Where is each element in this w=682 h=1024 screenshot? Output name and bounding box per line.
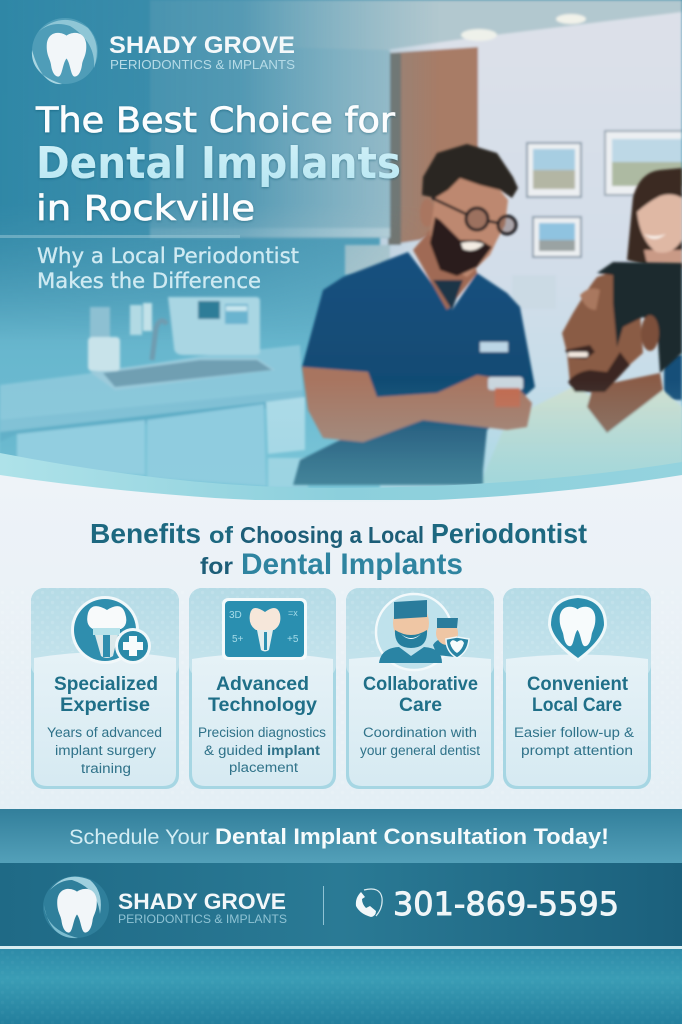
card description: Years of advanced — [47, 725, 162, 740]
footer logo — [43, 876, 109, 938]
hero photo: clinic scene — [0, 0, 682, 490]
icon: phone — [356, 889, 382, 917]
card title: Care — [399, 695, 442, 716]
call to action band: Schedule Your — [69, 826, 209, 849]
woman in background — [627, 168, 682, 400]
card title: Collaborative — [363, 674, 478, 695]
logo emblem — [32, 18, 98, 84]
logo: header — [32, 18, 295, 84]
logo tagline: PERIODONTICS & IMPLANTS — [110, 58, 295, 72]
panel: convenient local care — [503, 588, 651, 789]
icon: digital scan screen: 5+ — [232, 634, 244, 645]
card description — [198, 725, 326, 775]
hero title: Dental Implants — [36, 138, 401, 189]
bottom band — [0, 946, 682, 1024]
benefits heading — [90, 518, 587, 581]
card description — [514, 725, 634, 758]
bottom teal fade — [0, 380, 682, 490]
card description: Easier follow-up & — [514, 725, 634, 740]
footer contact band — [0, 863, 682, 946]
hero title — [35, 101, 401, 229]
benefits section background — [0, 475, 682, 812]
wave divider — [0, 453, 682, 500]
card description: placement — [229, 760, 298, 775]
kitchen counter and sink — [0, 297, 308, 488]
hero title: The Best Choice for — [35, 101, 396, 141]
card description: & guided — [204, 743, 263, 758]
dentist face — [420, 199, 434, 227]
card title: Specialized — [54, 674, 158, 695]
card description: Precision diagnostics — [198, 725, 326, 740]
benefits heading: Choosing a — [240, 522, 362, 548]
card description — [47, 725, 162, 776]
card title: Local Care — [532, 695, 622, 716]
panel: advanced technology — [189, 588, 336, 789]
benefits heading: Dental Implants — [241, 548, 463, 581]
benefits heading: of — [209, 522, 233, 548]
icon: dental care team — [376, 594, 469, 670]
card title: Technology — [208, 695, 317, 716]
card description: implant — [267, 743, 321, 758]
dentist forearm and hands — [302, 367, 532, 442]
card title: Convenient — [527, 674, 629, 695]
benefits heading: for — [200, 553, 233, 579]
icon: dental implant — [71, 596, 151, 664]
card description — [360, 725, 480, 758]
card title: Advanced — [216, 674, 309, 695]
call to action band: Dental Implant Consultation Today! — [215, 824, 609, 849]
panel: specialized expertise — [31, 588, 179, 789]
card title — [208, 674, 317, 716]
patient — [480, 262, 682, 484]
card description: your general dentist — [360, 743, 480, 758]
call to action band — [0, 809, 682, 863]
card description: implant surgery — [55, 743, 156, 758]
hero subtitle — [37, 244, 299, 293]
card title: Expertise — [60, 695, 150, 716]
icon: digital scan screen: +5 — [287, 634, 299, 645]
icon: digital scan screen — [222, 598, 307, 660]
card description: prompt attention — [521, 743, 633, 758]
dentist scrubs — [293, 252, 535, 485]
card title — [54, 674, 158, 716]
hero subtitle: Why a Local Periodontist — [37, 244, 299, 268]
card title — [527, 674, 629, 716]
logo name: SHADY GROVE — [109, 32, 295, 59]
icon: digital scan screen: =x — [288, 608, 298, 618]
icon: digital scan screen: 3D — [229, 610, 242, 621]
hero subtitle: Makes the Difference — [37, 269, 261, 293]
footer tagline: PERIODONTICS & IMPLANTS — [118, 914, 287, 926]
card description: training — [81, 761, 131, 776]
clinic wall and ceiling — [150, 0, 682, 490]
card title — [363, 674, 478, 716]
left teal overlay — [0, 0, 440, 340]
benefits heading: Benefits — [90, 518, 201, 549]
picture frames — [526, 130, 682, 258]
phone number: 301-869-5595 — [393, 885, 619, 923]
panel: collaborative care — [346, 588, 494, 789]
footer brand name: SHADY GROVE — [118, 889, 286, 914]
benefits heading: Local — [368, 522, 424, 548]
benefits heading: Periodontist — [431, 518, 587, 549]
hero title: in Rockville — [36, 189, 255, 229]
dentist — [293, 144, 535, 485]
card description: Coordination with — [363, 725, 477, 740]
icon: map pin with tooth — [548, 595, 607, 662]
